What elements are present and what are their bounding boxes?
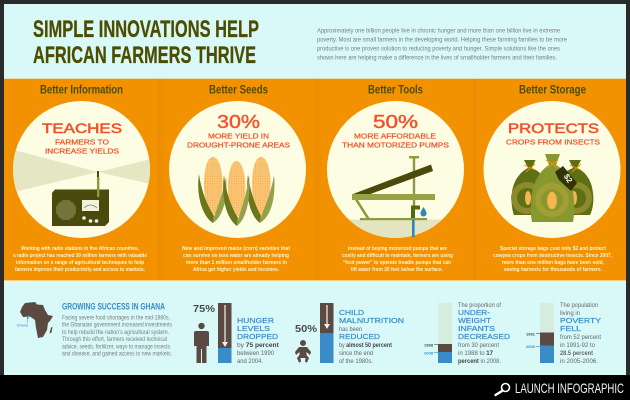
stat: child malnutrition: REDUCED — [339, 334, 380, 341]
stat: hunger: DROPPED — [237, 334, 278, 341]
stat: child malnutrition — [295, 303, 404, 365]
icon: maize ears — [198, 157, 274, 226]
bar: 1988 to 2008: 1988 — [424, 344, 433, 348]
text: maize varieties: can survive on less water are already helping — [183, 253, 289, 259]
intro text: Approximately one billion people live in chronic hunger and more than one billion live in extreme — [317, 28, 560, 34]
stat: underweight infants: The proportion of — [458, 302, 501, 309]
stat: underweight infants: in 1988 to 17 — [458, 350, 493, 357]
stat: underweight infants: percent in 2008. — [458, 358, 501, 365]
stat: poverty: The population — [560, 302, 598, 309]
heading: better tools: Better Tools — [368, 84, 423, 96]
stat: child malnutrition: of the 1980s. — [339, 358, 373, 365]
bar: 1991 to 2006: 1991 — [526, 332, 535, 336]
text: ghana: GROWING SUCCESS IN GHANA — [62, 302, 165, 312]
title: SIMPLE INNOVATIONS HELP — [33, 16, 259, 43]
stat: underweight infants: INFANTS — [458, 326, 495, 333]
stat: hunger: HUNGER — [237, 318, 274, 325]
text: storage bags: saving harvests for thousands of farmers. — [504, 267, 602, 273]
heading: better seeds: Better Seeds — [209, 84, 268, 96]
circle: tools — [327, 101, 464, 238]
text: maize varieties: more than 1 million smallholder farmers in — [186, 260, 287, 266]
text: ghana: the Ghanaian government increased investments — [62, 322, 172, 328]
icon: person — [194, 323, 209, 363]
panel: better tools — [322, 84, 470, 273]
icon: magnifier — [496, 384, 510, 395]
map: africa: Ghana — [16, 324, 29, 328]
stat: hunger: 75% — [193, 303, 216, 315]
circle: seeds — [169, 101, 306, 238]
header panel — [4, 4, 626, 79]
stat: underweight infants: UNDER- — [458, 310, 491, 317]
icon: treadle pump — [349, 156, 442, 238]
stat: underweight infants: DECREASED — [458, 334, 510, 341]
right ear — [247, 157, 274, 223]
text: maize varieties: New and improved maize (corn) varieties that — [182, 246, 290, 252]
bar: 1991 to 2006 — [526, 303, 554, 363]
stat: underweight infants: from 30 percent — [458, 342, 499, 349]
text: ghana: to help rebuild the nation’s agricultural system. — [62, 329, 169, 336]
bar: 75 percent — [218, 303, 232, 363]
icon: baby — [295, 340, 311, 362]
stat: hunger: by 75 percent — [237, 342, 280, 349]
stat: hunger: and 2004. — [237, 358, 263, 365]
panel: better storage — [484, 84, 620, 273]
stat: child malnutrition: MALNUTRITION — [339, 318, 404, 325]
circle text: protects — [506, 121, 600, 146]
text: ghana: and disease, and gained access to new markets. — [62, 350, 172, 358]
circle text: protects: CROPS FROM INSECTS — [506, 140, 600, 146]
bar: 1991 to 2006: 2006 — [526, 345, 535, 349]
centre ear — [223, 161, 250, 226]
text: treadle pumps: lift water from 20 feet below the surface. — [351, 267, 443, 273]
title — [33, 16, 259, 69]
text: radio project — [13, 246, 148, 273]
circle text: teaches: TEACHES — [42, 121, 122, 136]
text: treadle pumps: costly and difficult to maintain, farmers are using — [342, 253, 453, 259]
stat: poverty: in 1991-92 to — [560, 342, 595, 349]
circle text: 30 percent — [187, 112, 290, 150]
stat: hunger — [193, 303, 280, 365]
bar: 50 percent — [320, 303, 334, 363]
intro text: shown here are helping make a difference in the lives of smallholder farmers and their families. — [317, 54, 557, 62]
stat: hunger: LEVELS — [237, 326, 270, 333]
bar: 1988 to 2008: 2008 — [424, 352, 433, 356]
circle text: 50 percent: 50% — [373, 112, 418, 132]
circle: information — [13, 101, 150, 238]
panel: better information — [10, 84, 155, 273]
radio beams — [13, 150, 150, 192]
orange band — [4, 79, 626, 280]
panel: growing success in ghana — [4, 280, 626, 375]
heading: better storage: Better Storage — [519, 84, 586, 96]
intro text: productive is one proven solution to reducing poverty and hunger. Simple solutions like the ones — [317, 46, 560, 52]
right bag — [552, 160, 593, 215]
text: ghana — [62, 302, 172, 358]
stat: poverty: in 2005-2006. — [560, 358, 598, 365]
stat: child malnutrition: since the end — [339, 350, 373, 357]
left bag — [511, 160, 552, 215]
stat: poverty: POVERTY — [560, 318, 601, 325]
stat: child malnutrition: has been — [339, 326, 362, 333]
icon: radio — [52, 171, 109, 226]
circle text: 50 percent — [342, 112, 449, 150]
stat: child malnutrition: CHILD — [339, 310, 364, 317]
stat: poverty: living in — [560, 310, 580, 317]
text: maize varieties — [182, 246, 290, 273]
stat: child malnutrition: 50% — [295, 323, 318, 335]
centre bag — [531, 154, 574, 222]
stat: child malnutrition: by almost 50 percent — [339, 342, 393, 349]
stat: underweight infants: WEIGHT — [458, 318, 492, 325]
text: radio project: farmers improve their productivity and access to markets. — [15, 267, 145, 273]
text: ghana: advice, seeds, fertilizer, ways to manage insects — [62, 344, 170, 350]
text: treadle pumps: “foot power” to operate treadle pumps that can — [343, 260, 451, 266]
circle text: teaches — [42, 121, 122, 156]
text: storage bags: more than one million bags have been sold, — [502, 260, 604, 266]
text: storage bags: Special storage bags cost only $2 and protect — [500, 246, 606, 252]
circle text: protects: PROTECTS — [508, 121, 599, 136]
circle text: teaches: FARMERS TO — [55, 140, 110, 146]
stat: poverty — [526, 302, 601, 365]
intro text — [317, 28, 567, 62]
circle: storage — [484, 101, 620, 238]
icon: storage bags — [511, 154, 593, 222]
circle text: 30 percent: MORE YIELD IN — [208, 134, 269, 140]
intro text: poverty. Most are small farmers in the developing world. Helping these farming families to be more — [317, 36, 567, 44]
circle text: 30 percent: 30% — [217, 112, 260, 132]
circle text: teaches: INCREASE YIELDS — [45, 148, 119, 156]
circle text: 50 percent: THAN MOTORIZED PUMPS — [342, 142, 449, 150]
heading: better information: Better Information — [40, 84, 123, 96]
stat: poverty: from 52 percent — [560, 334, 601, 341]
text: radio project: a radio project has reached 39 million farmers with valuable — [13, 253, 148, 259]
stat: underweight infants — [424, 302, 510, 365]
circle text: 50 percent: MORE AFFORDABLE — [354, 134, 436, 140]
bar: 1988 to 2008 — [424, 303, 452, 363]
left ear — [198, 157, 226, 223]
text: treadle pumps — [342, 246, 453, 273]
title: AFRICAN FARMERS THRIVE — [33, 42, 256, 69]
text: ghana: Through this effort, farmers received technical — [62, 336, 167, 343]
text: radio project: information on a range of agricultural techniques to help — [16, 260, 144, 266]
price tag: $2 — [562, 172, 574, 185]
text: storage bags — [493, 246, 612, 273]
map: africa — [16, 302, 53, 338]
text: maize varieties: Africa get higher yields and incomes. — [193, 267, 279, 273]
stat: hunger: between 1990 — [237, 350, 274, 357]
text: radio project: Working with radio stations in five African countries, — [21, 246, 139, 252]
panel: better seeds — [169, 84, 306, 273]
text: ghana: Facing severe food shortages in the mid-1980s, — [62, 314, 170, 322]
stat: poverty: FELL — [560, 326, 581, 333]
stat: poverty: 28.5 percent — [560, 350, 594, 357]
text: treadle pumps: Instead of buying motorized pumps that are — [348, 246, 448, 252]
circle text: 30 percent: DROUGHT-PRONE AREAS — [187, 142, 290, 150]
